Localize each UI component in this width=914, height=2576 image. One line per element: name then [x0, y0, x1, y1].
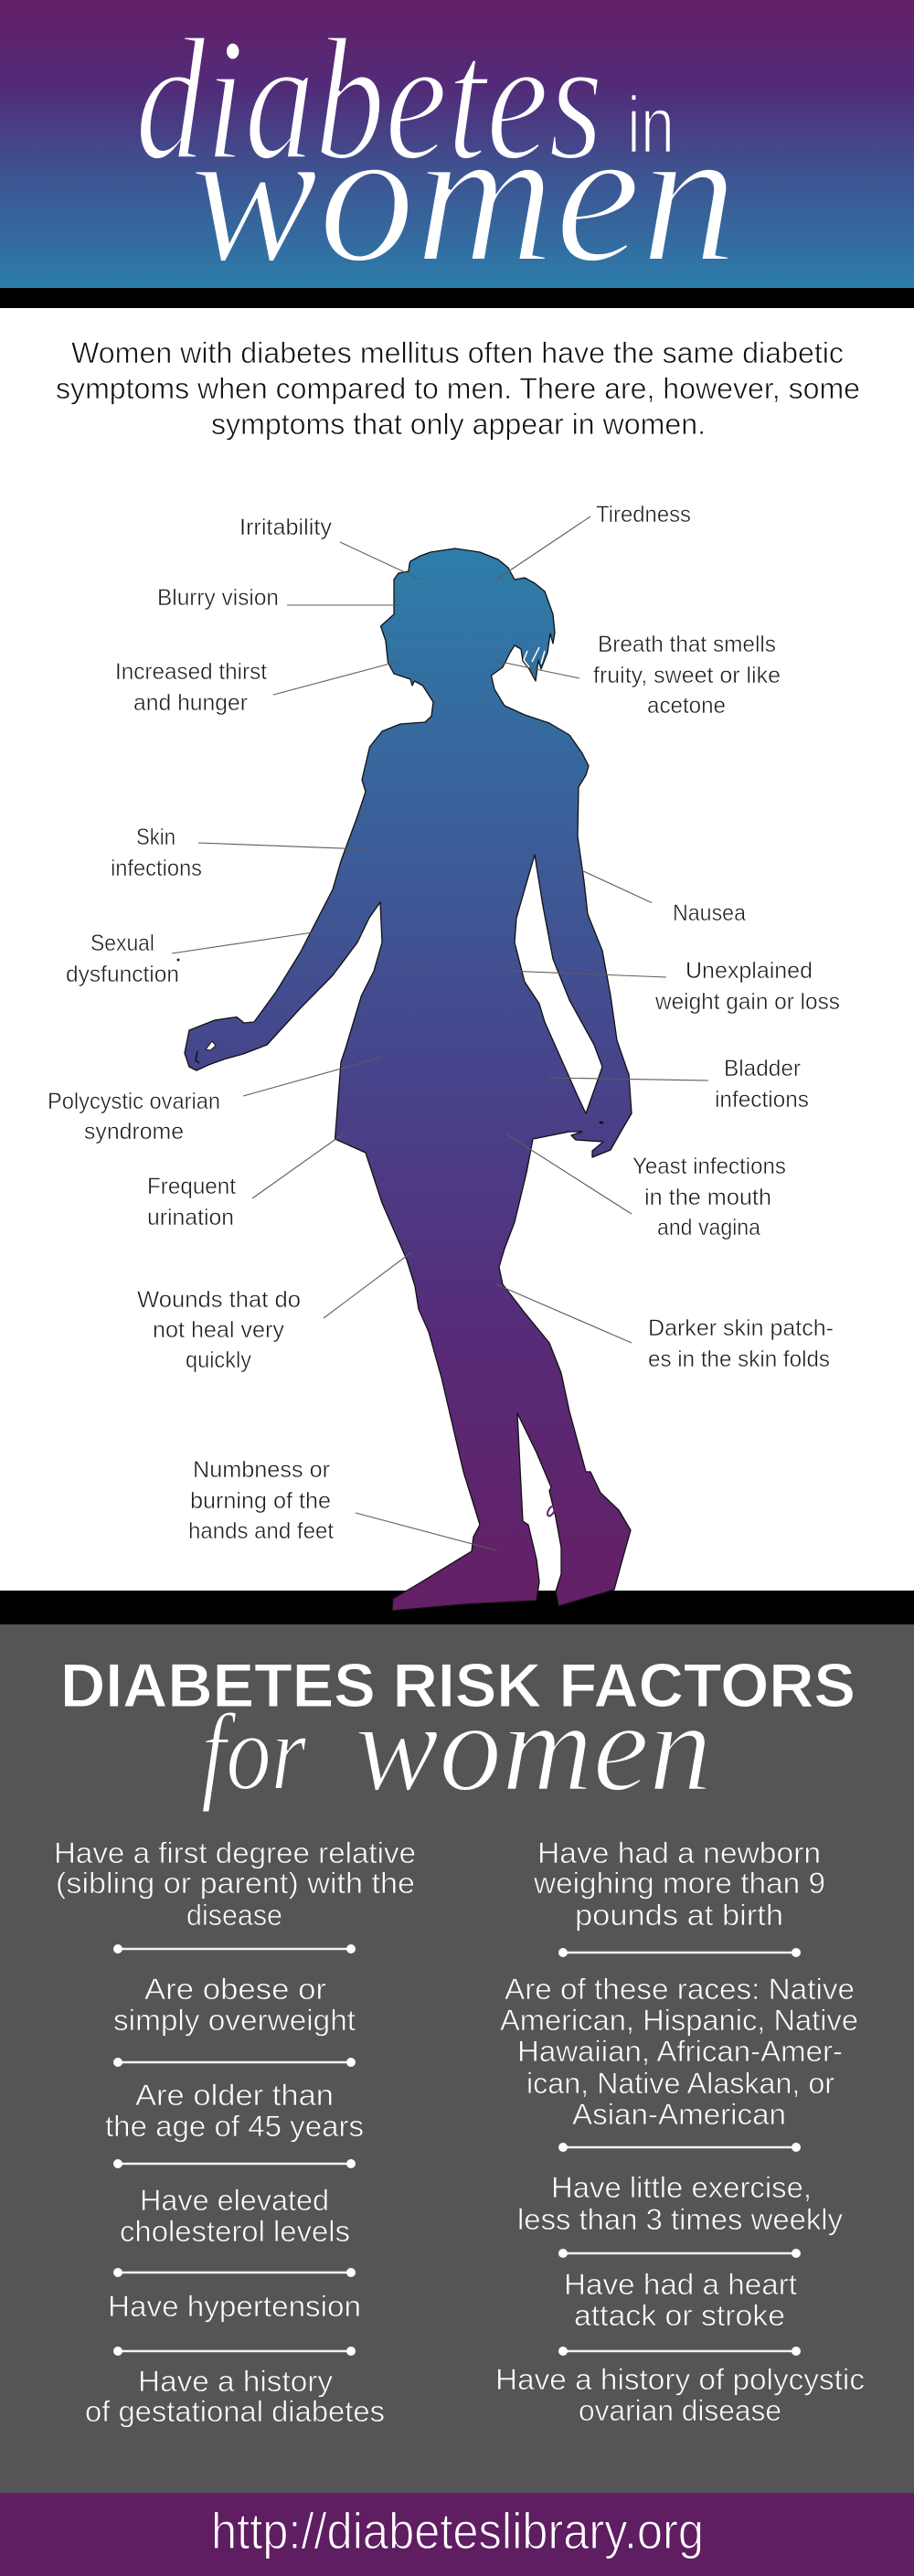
risk: cholesterol: Have elevated	[140, 2184, 329, 2217]
symptom: Tiredness: Tiredness	[596, 502, 691, 527]
risk: heart attack or stroke: attack or stroke	[574, 2299, 785, 2332]
symptom: Breath that smells fruity: acetone	[647, 693, 726, 719]
symptom: Darker skin patches: es in the skin folds	[648, 1347, 830, 1372]
silhouette of a woman	[185, 548, 632, 1611]
risk: races	[500, 1973, 858, 2131]
risk: races: American, Hispanic, Native	[500, 2004, 858, 2037]
symptom: Yeast infections: and vagina	[657, 1215, 760, 1240]
symptom: Polycystic ovarian syndrome	[48, 1058, 380, 1144]
divider	[113, 1944, 356, 1953]
symptom: Polycystic ovarian syndrome: Polycystic ovarian	[48, 1089, 220, 1114]
symptom: Bladder infections	[548, 1056, 809, 1112]
symptom: Breath that smells fruity	[496, 632, 781, 719]
symptom: Numbness or burning	[188, 1457, 496, 1550]
symptom: Wounds that do not heal: quickly	[186, 1347, 251, 1373]
divider	[558, 2143, 801, 2152]
symptom: Unexplained weight gain or loss	[506, 958, 840, 1015]
intro text: Women with diabetes mellitus often have the same diabetic	[71, 336, 844, 369]
risk: races: Asian-American	[572, 2098, 786, 2131]
symptom: Darker skin patches: Darker skin patch-	[648, 1315, 834, 1341]
symptom: Unexplained weight gain or loss: Unexplained	[686, 958, 813, 984]
risk: older than 45: Are older than	[135, 2079, 334, 2112]
symptom: Yeast infections: in the mouth	[644, 1185, 771, 1210]
divider	[113, 2058, 356, 2067]
symptom: Frequent urination: urination	[147, 1205, 234, 1230]
risk: hypertension: Have hypertension	[108, 2290, 361, 2323]
title: diabetes in women: in	[627, 80, 675, 170]
symptom: Tiredness	[496, 502, 691, 580]
symptom: Darker skin patches	[496, 1284, 834, 1372]
hand and hair details	[196, 647, 603, 1517]
risk: gestational diabetes: Have a history	[138, 2365, 333, 2398]
symptom: Breath that smells fruity: Breath that smells	[598, 632, 776, 657]
symptom: Sexual dysfunction: Sexual	[90, 931, 154, 956]
risk: cholesterol: cholesterol levels	[120, 2215, 350, 2248]
symptom: Yeast infections: Yeast infections	[632, 1154, 786, 1179]
heading: for women: women	[355, 1677, 712, 1818]
risk: first degree relative: (sibling or parent) with the	[56, 1867, 415, 1900]
heading: for women: for	[201, 1691, 307, 1813]
symptom: Wounds that do not heal	[137, 1252, 411, 1373]
risk: obese: simply overweight	[113, 2004, 356, 2037]
symptom: Blurry vision: Blurry vision	[157, 585, 279, 611]
symptom: Frequent urination	[147, 1134, 344, 1230]
symptom: Skin infections	[111, 825, 365, 881]
ground bar	[0, 1591, 914, 1624]
divider	[558, 1948, 801, 1957]
symptom: Increased thirst and hunger: and hunger	[133, 690, 248, 716]
symptom: Nausea: Nausea	[673, 900, 746, 926]
symptom: Unexplained weight gain or loss: weight gain or loss	[654, 989, 840, 1015]
header banner	[0, 0, 914, 308]
symptom: Skin infections: infections	[111, 856, 202, 881]
risk: obese	[113, 1973, 356, 2037]
heading: diabetes risk factors: DIABETES RISK FACTORS	[60, 1651, 856, 1720]
risk: little exercise: less than 3 times weekly	[517, 2203, 843, 2236]
risk: races: Are of these races: Native	[505, 1973, 855, 2006]
symptom: Sexual dysfunction	[66, 931, 313, 987]
intro text: symptoms that only appear in women.	[211, 408, 706, 441]
symptom: Polycystic ovarian syndrome: syndrome	[84, 1119, 184, 1144]
symptom: Bladder infections: Bladder	[724, 1056, 801, 1081]
risk: cholesterol	[120, 2184, 350, 2248]
risk: races: Hawaiian, African-Amer-	[517, 2035, 843, 2068]
footer with url: http://diabeteslibrary.org	[211, 2502, 704, 2560]
risk: gestational diabetes	[85, 2365, 385, 2428]
symptom: Nausea	[569, 865, 746, 926]
risk: first degree relative: Have a first degree relative	[54, 1836, 416, 1869]
heading: for women	[201, 1677, 712, 1818]
risk: older than 45: the age of 45 years	[105, 2110, 364, 2143]
divider	[113, 2268, 356, 2277]
symptom: Frequent urination: Frequent	[147, 1174, 236, 1199]
divider	[558, 2249, 801, 2258]
symptom: Increased thirst and hunger	[115, 659, 400, 716]
symptom: Skin infections: Skin	[136, 825, 175, 850]
divider	[113, 2159, 356, 2168]
intro text: symptoms when compared to men. There are, however, some	[56, 372, 860, 405]
title: diabetes in women: diabetes	[135, 4, 603, 197]
symptom: Numbness or burning: hands and feet	[188, 1518, 334, 1544]
risk: first degree relative	[54, 1836, 416, 1932]
divider	[558, 2347, 801, 2356]
symptom: Breath that smells fruity: fruity, sweet or like	[593, 663, 781, 688]
risk: large newborn: pounds at birth	[575, 1899, 783, 1932]
risk: obese: Are obese or	[144, 1973, 326, 2006]
risk: gestational diabetes: of gestational diabetes	[85, 2395, 385, 2428]
risk: heart attack or stroke	[564, 2268, 797, 2332]
intro text	[56, 336, 860, 441]
risk: little exercise	[517, 2171, 843, 2236]
risk: first degree relative: disease	[186, 1899, 282, 1932]
symptom: Irritability	[239, 515, 420, 580]
symptom: Yeast infections	[505, 1134, 786, 1240]
title: diabetes in women: women	[189, 85, 738, 303]
risk: large newborn	[533, 1836, 825, 1932]
symptom: Sexual dysfunction: dysfunction	[66, 962, 179, 987]
title: diabetes in women	[135, 4, 738, 303]
panel: risk factors	[0, 1624, 914, 2493]
symptom: Numbness or burning: Numbness or	[193, 1457, 330, 1483]
risk: large newborn: weighing more than 9	[533, 1867, 825, 1900]
divider	[113, 2347, 356, 2356]
symptom: Wounds that do not heal: not heal very	[153, 1317, 285, 1343]
symptom: Increased thirst and hunger: Increased thirst	[115, 659, 267, 685]
symptom: Bladder infections: infections	[715, 1087, 809, 1112]
risk: heart attack or stroke: Have had a heart	[564, 2268, 797, 2301]
risk: older than 45	[105, 2079, 364, 2143]
risk: polycystic ovarian disease	[495, 2363, 865, 2427]
symptom: Numbness or burning: burning of the	[190, 1488, 331, 1514]
footer with url	[0, 2493, 914, 2576]
symptom: Wounds that do not heal: Wounds that do	[137, 1287, 301, 1313]
risk: races: ican, Native Alaskan, or	[526, 2067, 834, 2100]
risk: large newborn: Have had a newborn	[537, 1836, 821, 1869]
risk: polycystic ovarian disease: ovarian disease	[579, 2394, 781, 2427]
risk: polycystic ovarian disease: Have a history of polycystic	[495, 2363, 865, 2396]
risk: little exercise: Have little exercise,	[551, 2171, 812, 2204]
symptom: Irritability: Irritability	[239, 515, 333, 540]
